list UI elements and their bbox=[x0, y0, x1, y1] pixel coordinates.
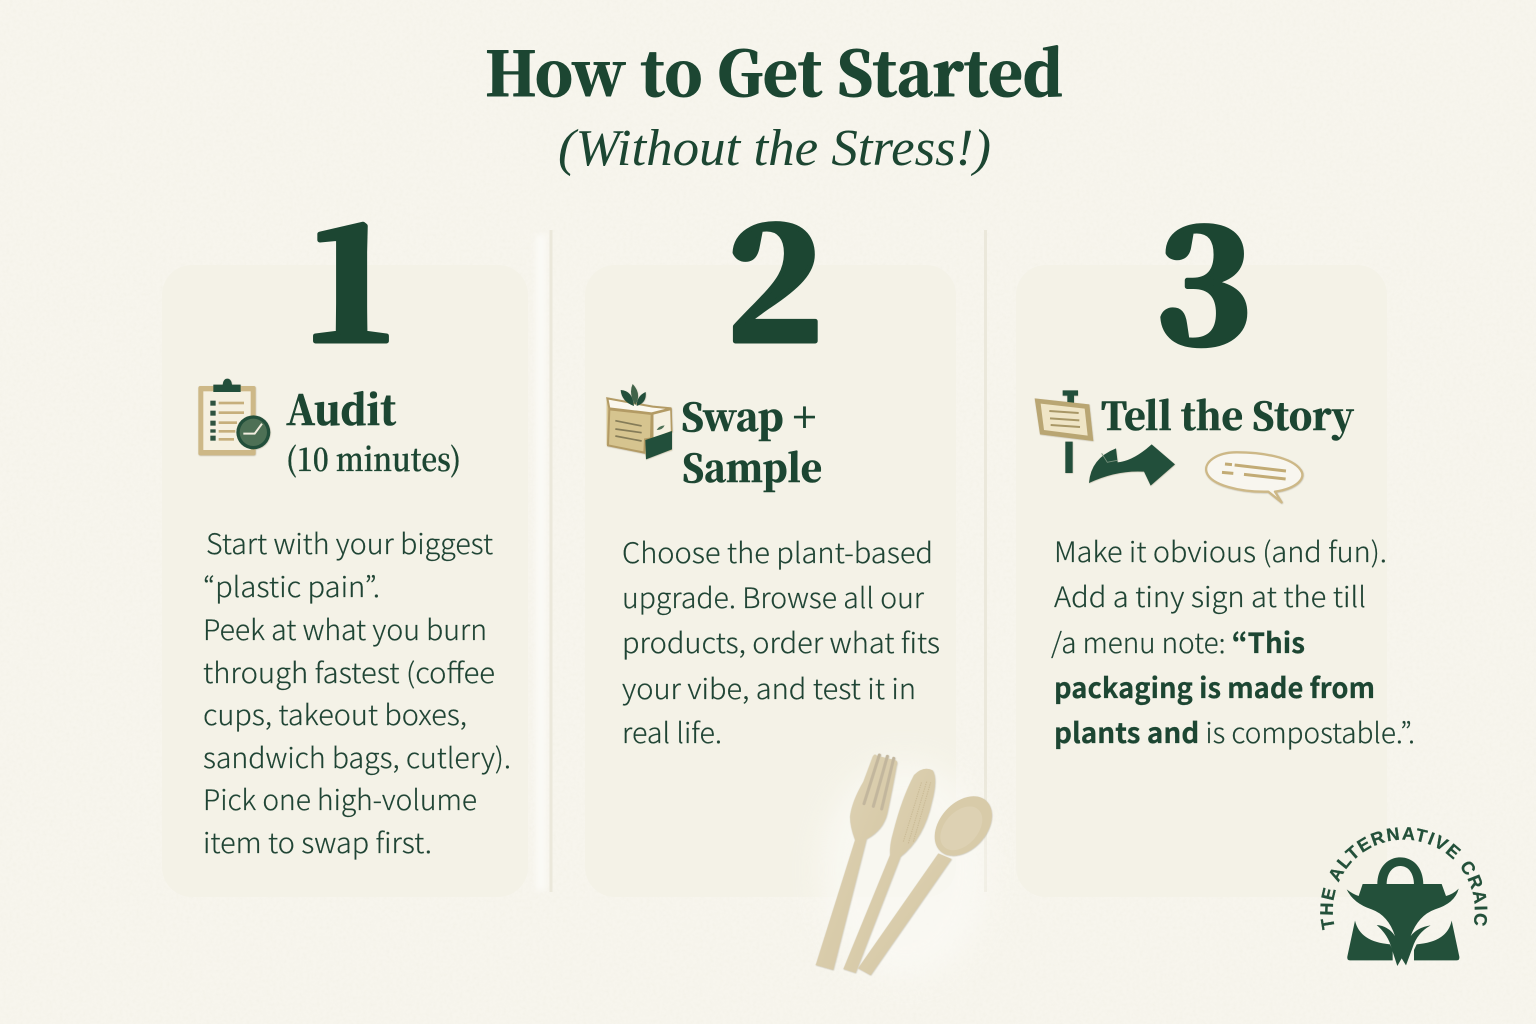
text: step 1 body: Pick one high-volume bbox=[203, 779, 477, 819]
subheading: 10 minutes: (10 minutes) bbox=[286, 435, 461, 481]
text: step 2 body: Choose the plant-based bbox=[622, 532, 933, 572]
fork bbox=[816, 755, 897, 970]
text: step 3 body bbox=[1051, 531, 1415, 752]
text: step 2 body: upgrade. Browse all our bbox=[622, 577, 925, 617]
text: step 1 body: item to swap first. bbox=[203, 822, 432, 862]
text: step 1 body: cups, takeout boxes, bbox=[203, 694, 467, 734]
heading: Audit: Audit bbox=[286, 378, 396, 437]
heading: Tell the Story: Tell the Story bbox=[1101, 386, 1354, 441]
panel: step 1 background bbox=[162, 265, 528, 897]
icon: curved arrow bbox=[1089, 444, 1175, 486]
text: step 1 body: “plastic pain”. bbox=[203, 566, 380, 606]
logo bag mark bbox=[1347, 857, 1459, 966]
text: step 1 body: Start with your biggest bbox=[206, 523, 493, 563]
icon: speech bubble bbox=[1206, 452, 1302, 502]
step 3 number: 3 bbox=[1155, 159, 1252, 389]
icon: clipboard with clock bbox=[198, 379, 270, 455]
spoon bbox=[858, 785, 1003, 975]
text: step 3 body: Add a tiny sign at the till bbox=[1054, 576, 1366, 616]
panel: step 3 background bbox=[1016, 265, 1387, 897]
text: step 2 body bbox=[622, 532, 940, 752]
text: step 3 body: plants and is compostable.”. bbox=[1054, 712, 1415, 752]
text: step 3 body: Make it obvious (and fun). bbox=[1054, 531, 1387, 571]
heading: Swap + Sample: Swap + bbox=[681, 387, 816, 442]
text: step 1 body: sandwich bags, cutlery). bbox=[203, 737, 511, 777]
logo: The Alternative Craic bbox=[1320, 827, 1488, 966]
illustration: plant-based cutlery bbox=[816, 755, 1003, 975]
text: step 2 body: products, order what fits bbox=[622, 622, 940, 662]
step 1 number: 1 bbox=[302, 157, 399, 387]
icon: box with leaves bbox=[607, 384, 672, 459]
panel: step 2 background bbox=[585, 265, 956, 897]
step 2 number: 2 bbox=[726, 157, 823, 387]
text: step 3 body: packaging is made from bbox=[1054, 667, 1375, 707]
heading: Swap + Sample bbox=[681, 387, 822, 493]
logo wordmark: THE ALTERNATIVE CRAIC bbox=[1320, 827, 1488, 930]
knife bbox=[843, 769, 935, 973]
text: step 1 body: Peek at what you burn bbox=[203, 609, 487, 649]
heading: Swap + Sample: Sample bbox=[682, 438, 822, 493]
text: step 3 body: /a menu note: “This bbox=[1051, 622, 1305, 662]
icon: signpost bbox=[1035, 390, 1093, 473]
text: step 2 body: your vibe, and test it in bbox=[622, 668, 916, 708]
title: How to Get Started bbox=[485, 27, 1063, 114]
subtitle: (Without the Stress!) bbox=[558, 120, 991, 177]
text: step 1 body: through fastest (coffee bbox=[203, 652, 495, 692]
text: step 1 body bbox=[203, 523, 511, 862]
text: step 2 body: real life. bbox=[622, 712, 722, 752]
